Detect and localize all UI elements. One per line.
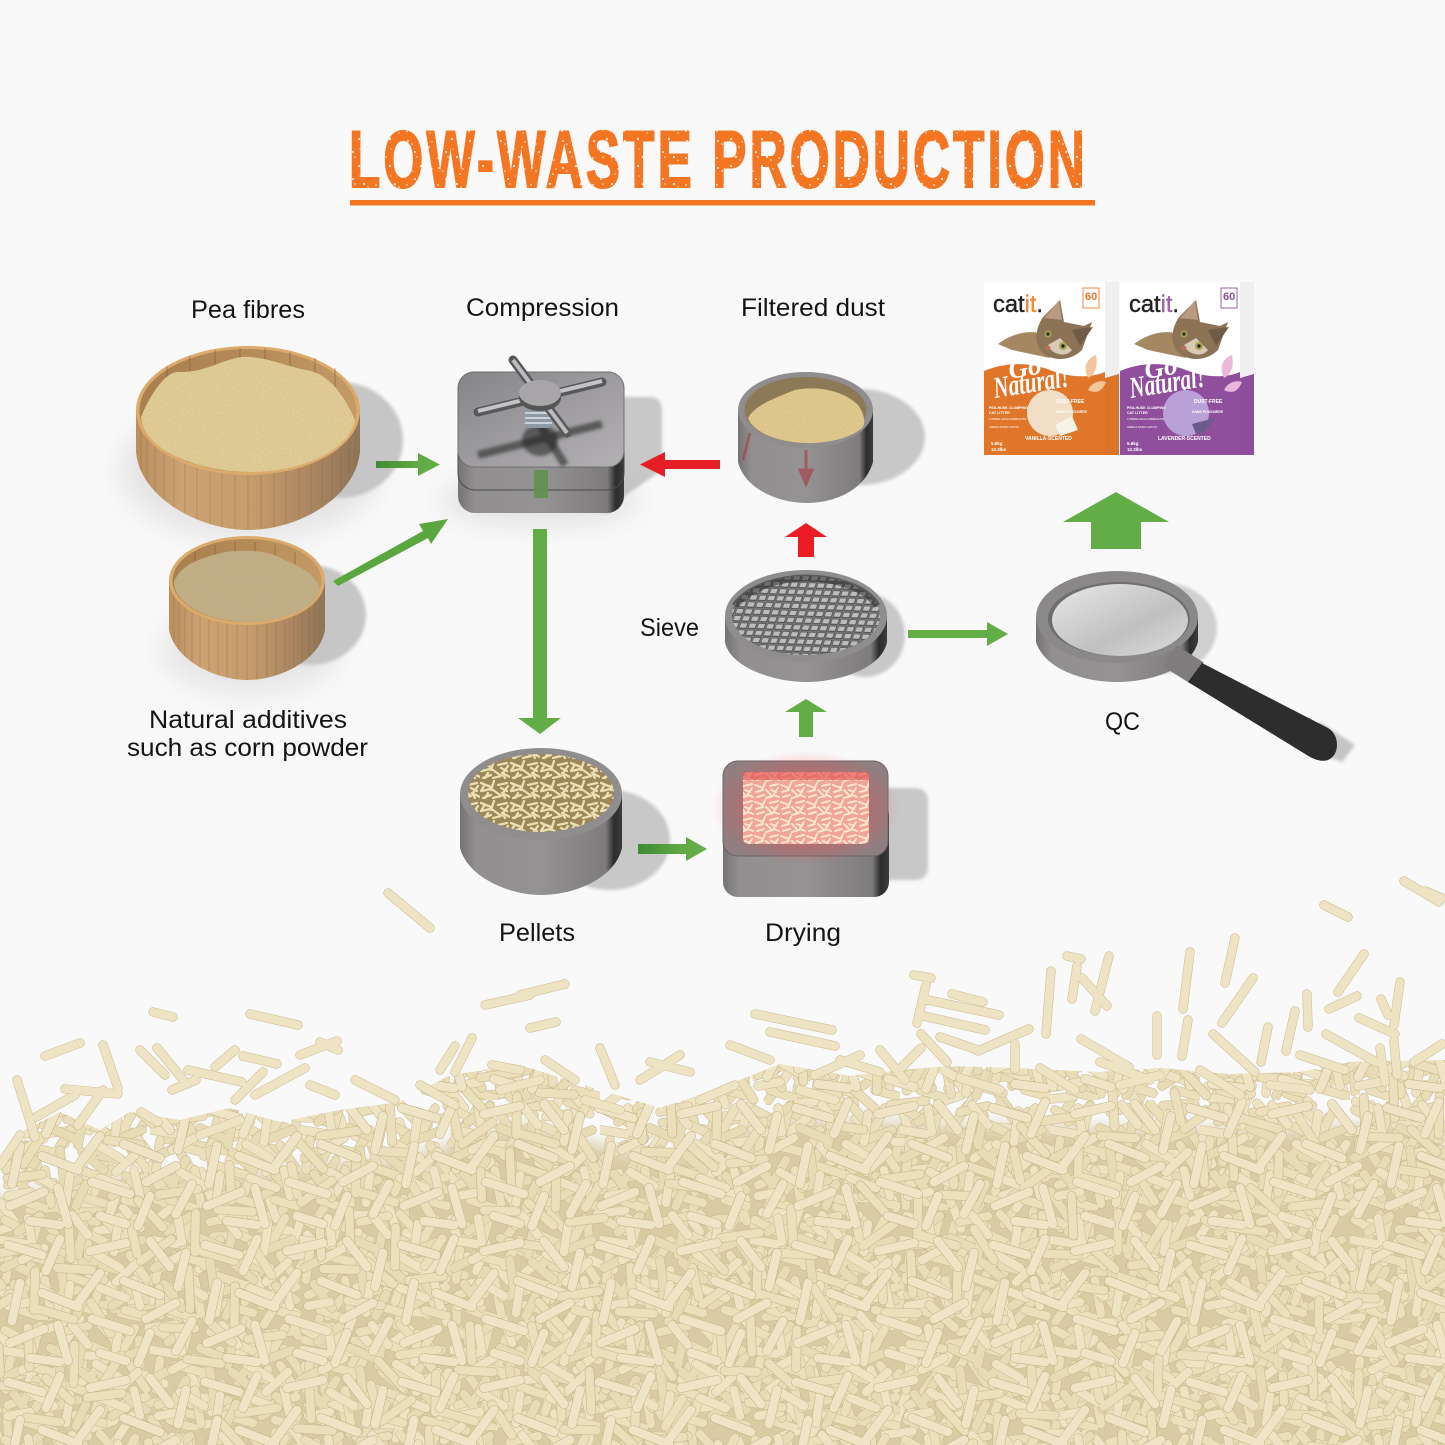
brand script: Natural! bbox=[990, 360, 1071, 405]
60 badge bbox=[1221, 288, 1237, 308]
litter sample bbox=[1163, 390, 1209, 436]
small print: DUST-FREE bbox=[1056, 399, 1085, 405]
cat photo bbox=[998, 300, 1093, 359]
label: filtered dust: Filtered dust bbox=[741, 294, 885, 322]
product box: vanilla scented bbox=[984, 282, 1119, 455]
process item: magnifying glass bbox=[1036, 571, 1355, 762]
arrow: drying to sieve bbox=[785, 699, 827, 737]
label: drying: Drying bbox=[765, 919, 841, 947]
small print: 12.3lbs bbox=[1127, 447, 1143, 452]
label: natural additives bbox=[127, 706, 368, 762]
press screw and cross handle bbox=[478, 360, 602, 433]
label: natural additives: such as corn powder bbox=[127, 734, 368, 762]
label: pea fibres: Pea fibres bbox=[191, 296, 305, 324]
small print: SANS POUSSIÈRE bbox=[1192, 409, 1224, 414]
small print: ARENA PARA GATOS bbox=[1127, 425, 1157, 429]
label: compression: Compression bbox=[466, 294, 619, 322]
60 badge bbox=[1083, 288, 1099, 308]
arrow: sieve to filtered dust bbox=[785, 523, 827, 557]
arrow: additives to compression bbox=[333, 519, 448, 586]
small print bbox=[1127, 399, 1224, 452]
small print: CAT LITTER bbox=[989, 411, 1010, 415]
small print: LITIÈRE AGGLOMÉRANTE bbox=[1127, 416, 1164, 421]
sand: additives bbox=[174, 551, 320, 622]
process item: drying tray bbox=[711, 750, 928, 897]
60 badge: 60 bbox=[1085, 291, 1097, 303]
lens bbox=[1052, 584, 1188, 656]
process item: sieve bbox=[725, 570, 905, 682]
pellets in bowl bbox=[468, 754, 614, 832]
brand script bbox=[990, 350, 1071, 405]
arrow: pellets to drying bbox=[638, 837, 707, 861]
brand script: Natural! bbox=[1126, 360, 1207, 405]
leaf accents bbox=[1086, 355, 1106, 392]
small print: 12.3lbs bbox=[991, 447, 1007, 452]
catit logo: catit. bbox=[993, 291, 1043, 318]
small print: LITIÈRE AGGLOMÉRANTE bbox=[989, 416, 1026, 421]
process item: filtered dust bowl bbox=[738, 372, 925, 503]
leaf accents bbox=[1222, 355, 1242, 392]
arrow: pea fibres to compression bbox=[376, 453, 440, 476]
small print: 5.6kg bbox=[991, 441, 1003, 446]
small print: 5.6kg bbox=[1127, 441, 1139, 446]
brand script: Go bbox=[1006, 350, 1044, 385]
small print: PEA-HUSK CLUMPING bbox=[989, 406, 1028, 410]
small print: LAVENDER-SCENTED bbox=[1158, 436, 1211, 442]
small print: SANS POUSSIÈRE bbox=[1056, 409, 1088, 414]
brand script bbox=[1126, 350, 1207, 405]
handle bbox=[1188, 663, 1337, 761]
label: QC: QC bbox=[1105, 708, 1140, 736]
catit logo: catit. bbox=[1129, 291, 1179, 318]
60 badge: 60 bbox=[1223, 291, 1235, 303]
pellet pile bbox=[0, 881, 1445, 1445]
pellets in tray bbox=[743, 772, 869, 844]
process item: compression press bbox=[440, 360, 662, 525]
small print: DUST-FREE bbox=[1194, 399, 1223, 405]
process item: pea fibres bbox=[120, 346, 403, 540]
small print: PEA-HUSK CLUMPING bbox=[1127, 406, 1166, 410]
arrow: filtered dust back to compression bbox=[640, 452, 720, 477]
loose pellets bbox=[0, 881, 1442, 1165]
small print: ARENA PARA GATOS bbox=[989, 425, 1019, 429]
red glow bbox=[711, 750, 901, 866]
arrow: sieve to QC bbox=[908, 622, 1008, 646]
arrow: compression to pellets bbox=[518, 529, 561, 734]
small print bbox=[989, 399, 1088, 452]
brand script: Go bbox=[1142, 350, 1180, 385]
collar bbox=[1170, 656, 1197, 673]
label: pellets: Pellets bbox=[499, 919, 575, 947]
title bbox=[349, 115, 1095, 206]
product box: lavender scented bbox=[1120, 282, 1254, 455]
label: natural additives: Natural additives bbox=[149, 706, 347, 734]
process item: natural additives bbox=[160, 536, 366, 695]
sand: filtered dust bbox=[748, 388, 864, 443]
small print: VANILLA-SCENTED bbox=[1025, 436, 1072, 442]
sand: pea fibres bbox=[141, 357, 355, 472]
process item: pellets bowl bbox=[460, 748, 670, 895]
press handle shadow bbox=[478, 424, 602, 465]
label: sieve: Sieve bbox=[640, 614, 699, 642]
arrow: QC to product bbox=[1063, 492, 1169, 549]
litter sample bbox=[1027, 390, 1073, 436]
cat photo bbox=[1134, 300, 1229, 359]
small print: CAT LITTER bbox=[1127, 411, 1148, 415]
